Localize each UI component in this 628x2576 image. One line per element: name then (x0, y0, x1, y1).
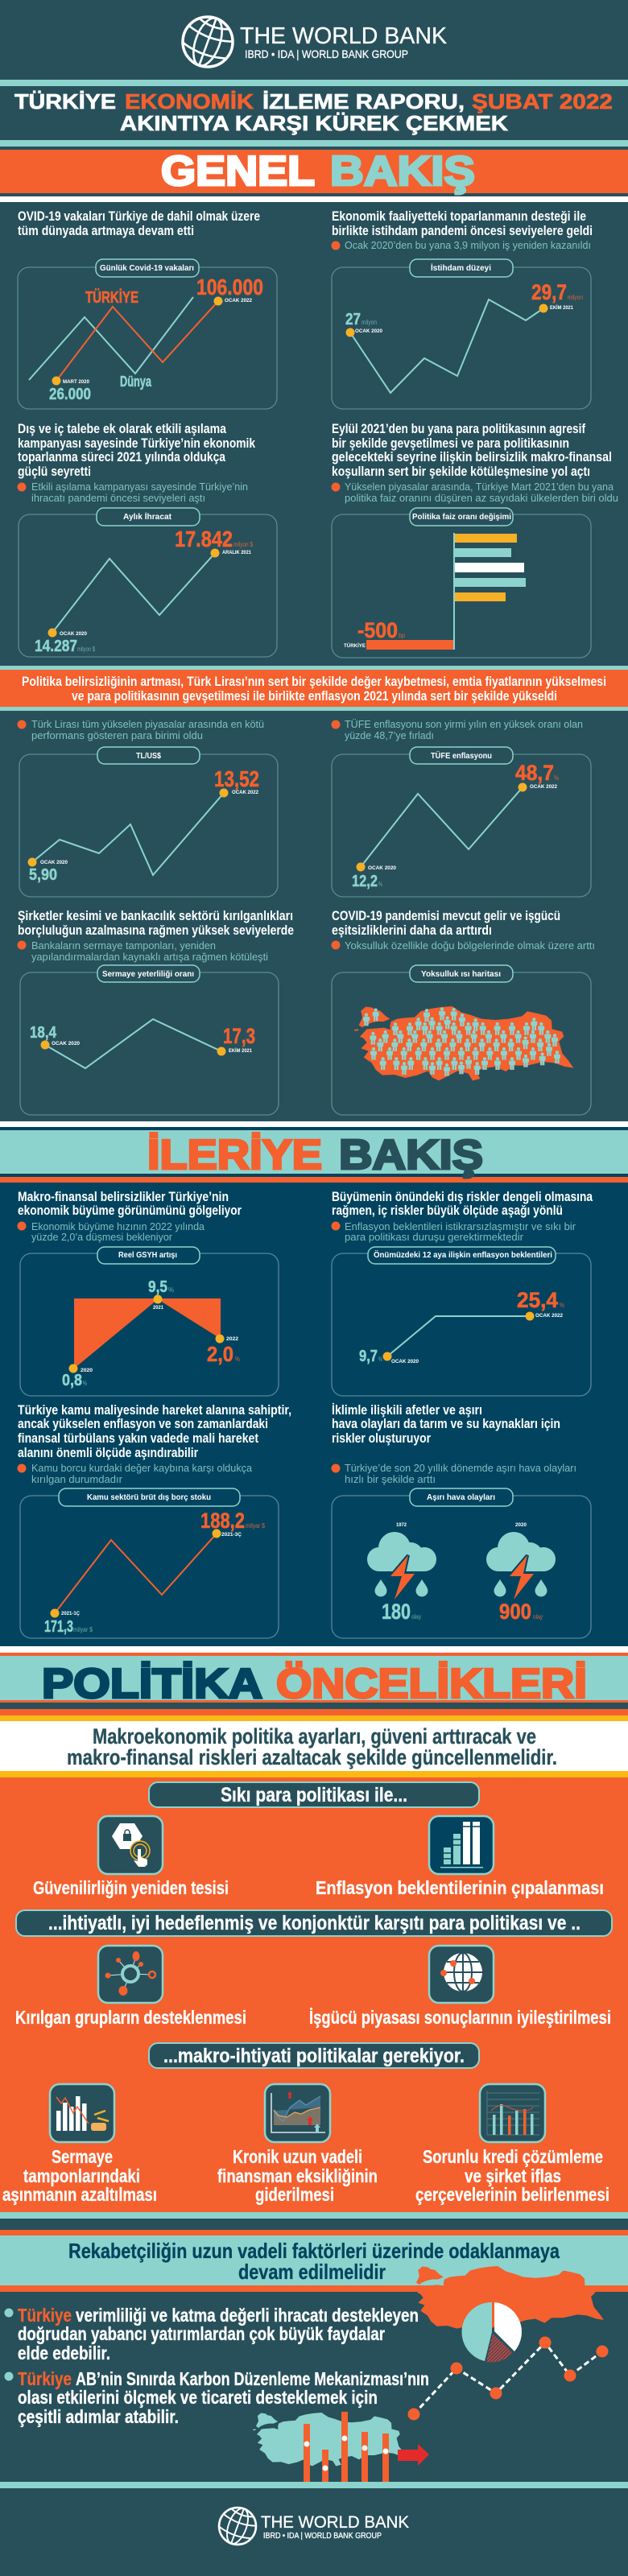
section banner: Genel Bakış: BAKIŞ (330, 148, 475, 195)
text block: corporate and banking: Şirketler kesimi ve bankacılık sektörü kırılganlıkları (18, 908, 293, 923)
panel: real GDP growth chart: 2,0 (207, 1342, 233, 1366)
panel: extreme weather events: 180 (382, 1600, 411, 1624)
panel: real GDP growth chart: % (235, 1355, 240, 1363)
banner: competitiveness (0, 2212, 628, 2292)
text block: corporate and banking: Bankaların sermaye tamponları, yeniden (31, 939, 216, 952)
panel: real GDP growth chart: 9,5 (148, 1278, 167, 1296)
text block: growth outlook: Ekonomik büyüme hızının 2022 yılında (31, 1220, 205, 1232)
panel: extreme weather events: 2020 (515, 1522, 527, 1528)
text block: public finance: kırılgan durumdadır (31, 1473, 123, 1485)
panel: public external debt chart: Kamu sektörü brüt dış borç stoku (87, 1492, 211, 1502)
text block: lira (18, 718, 264, 741)
text block: inequality: COVID-19 pandemisi mevcut gelir ve işgücü (332, 908, 560, 923)
chart: Turkey map with bars and arrow (253, 2412, 429, 2482)
panel: daily covid cases chart: 106.000 (196, 275, 263, 299)
text block: CPI: yüzde 48,7’ye fırladı (345, 729, 434, 741)
text block: exports: güçlü seyretti (18, 464, 91, 479)
map: Turkey orange (412, 2266, 604, 2331)
text block: inequality: Yoksulluk özellikle doğu bölgelerinde olmak üzere arttı (345, 939, 595, 952)
panel: employment level chart: 27 (345, 311, 361, 328)
text block: CPI (332, 718, 583, 741)
caption: capital buffers (2, 2146, 157, 2205)
text block: carbon border: AB’nin Sınırda Karbon Düzenleme Mekanizması’nın (76, 2368, 429, 2389)
icon: rising bars (429, 1816, 494, 1874)
panel: monthly exports chart: milyon $ (77, 645, 95, 653)
panel: CPI inflation chart (332, 747, 591, 897)
panel: extreme weather events: olay (533, 1612, 543, 1620)
panel: CPI inflation chart: % (554, 774, 559, 782)
panel: monthly exports chart (19, 508, 277, 657)
panel: real GDP growth chart: 2021 (153, 1305, 163, 1311)
text block: policy rate: Yükselen piyasalar arasında, Türkiye Mart 2021’den bu yana (345, 481, 614, 493)
panel: extreme weather events (332, 1488, 591, 1638)
panel: capital adequacy chart: 18,4 (30, 1024, 57, 1042)
text block: growth outlook (18, 1189, 242, 1243)
caption: long-term financing: giderilmesi (255, 2184, 334, 2205)
caption: problem loans: ve şirket iflas (465, 2165, 561, 2186)
text block: public finance: ancak yükselen enflasyon ve son zamanlardaki (18, 1416, 268, 1431)
text block: exports: Etkili aşılama kampanyası sayesinde Türkiye’nin (31, 481, 248, 493)
caption: capital buffers: Sermaye (52, 2146, 113, 2167)
panel: monthly exports chart: OCAK 2020 (60, 631, 87, 637)
panel: TL/US$ chart: 13,52 (214, 766, 259, 791)
section banner: Politika Öncelikleri (0, 1646, 628, 1721)
panel: TL/US$ chart: TL/US$ (136, 751, 161, 761)
map: Turkey with people (354, 1006, 573, 1080)
text block: policy rate: bir şekilde gevşetilmesi ve para politikasının (332, 436, 569, 451)
panel: daily covid cases chart (18, 259, 277, 409)
text block: inequality (332, 908, 595, 952)
text block: climate: hava olayları da tarım ve su kaynakları için (332, 1416, 560, 1431)
text block: carbon border (5, 2368, 429, 2427)
panel: employment level chart: İstihdam düzeyi (431, 262, 491, 273)
text block: exports: Dış ve iç talebe ek olarak etkili aşılama (18, 421, 226, 436)
icon: network (98, 1946, 163, 2003)
text block: policy rate: politika faiz oranını düşüren az sayıdaki ülkelerden biri oldu (345, 492, 618, 504)
text block: carbon border: Türkiye (18, 2368, 72, 2389)
panel: monthly exports chart: Aylık İhracat (123, 511, 171, 522)
text block: carbon border: olası etkilerini ölçmek ve ticareti desteklemek için (18, 2387, 378, 2408)
panel: public external debt chart: 2021-1Ç (61, 1611, 80, 1616)
panel: policy rate change bar chart: -500 (357, 618, 398, 642)
text block: climate: İklimle ilişkili afetler ve aşırı (332, 1402, 482, 1418)
panel: CPI inflation chart: OCAK 2020 (368, 865, 396, 871)
panel: daily covid cases chart: TÜRKİYE (85, 288, 138, 307)
section banner: Genel Bakış (0, 148, 628, 202)
text block: corporate and banking: borçluluğun azalmasına rağmen yüksek seviyelerde (18, 923, 294, 938)
panel: poverty heat map: Yoksulluk ısı haritası (421, 969, 501, 979)
text block: corporate and banking: yapılandırmalardan kaynaklı artışa rağmen kötüleşti (31, 951, 268, 963)
icon: falling bars and coins (50, 2084, 114, 2142)
panel: TL/US$ chart: OCAK 2022 (232, 790, 258, 795)
panel: policy rate change bar chart: Politika faiz oranı değişimi (412, 512, 511, 522)
text block: exports: toparlanma süreci 2021 yılında oldukça (18, 449, 225, 464)
text block: exports: kampanyası sayesinde Türkiye’nin ekonomik (18, 436, 255, 451)
panel: extreme weather events: 900 (499, 1600, 531, 1624)
text block: macroeconomic policy statement (0, 1721, 628, 1777)
logo: The World Bank top: IBRD • IDA | WORLD BANK GROUP (245, 47, 408, 60)
panel: public external debt chart: milyar $ (246, 1521, 265, 1530)
panel: capital adequacy chart: 17,3 (223, 1024, 255, 1048)
text block: public finance: finansal türbülans yakın vadede mali hareket (18, 1430, 258, 1446)
text block: policy rate (332, 421, 618, 504)
callout banner: inflation (0, 666, 628, 711)
panel: policy priorities: Kırılgan grupların desteklenmesi (15, 2007, 246, 2028)
panel: real GDP growth chart (20, 1247, 279, 1396)
panel: CPI inflation chart: OCAK 2022 (530, 784, 557, 790)
caption: long-term financing: Kronik uzun vadeli (233, 2146, 362, 2167)
panel: CPI inflation chart: 12,2 (352, 873, 378, 890)
text block: risks: rağmen, iç riskler büyük ölçüde aşağı yönlü (332, 1203, 563, 1218)
text block: CPI: TÜFE enflasyonu son yirmi yılın en yüksek oranı olan (345, 718, 583, 730)
section banner: Genel Bakış: GENEL (161, 148, 315, 195)
panel: capital adequacy chart (20, 965, 279, 1115)
text block: growth outlook: ekonomik büyüme görünümünü gölgeliyor (18, 1203, 242, 1218)
section banner: İleriye Bakış (0, 1121, 628, 1646)
panel: inflation expectations chart (332, 1247, 591, 1396)
text block: lira: performans gösteren para birimi oldu (31, 729, 203, 741)
section banner: İleriye Bakış: BAKIŞ (339, 1132, 483, 1179)
text block: public finance: Kamu borcu kurdaki değer kaybına karşı oldukça (31, 1462, 253, 1474)
heading pill: macroprudential: ...makro-ihtiyati politikalar gerekiyor. (163, 2045, 465, 2067)
panel: TL/US$ chart (19, 747, 278, 897)
panel: employment level chart: milyon (362, 318, 377, 326)
panel: CPI inflation chart: 48,7 (515, 761, 554, 785)
panel: extreme weather events: 1972 (396, 1522, 407, 1528)
banner: competitiveness: devam edilmelidir (238, 2260, 386, 2284)
text block: risks: Enflasyon beklentileri istikrarsızlaşmıştır ve sıkı bir (345, 1220, 576, 1232)
text block: employment: Ocak 2020’den bu yana 3,9 milyon iş yeniden kazanıldı (345, 239, 591, 251)
panel: CPI inflation chart: TÜFE enflasyonu (431, 750, 492, 761)
text block: public finance (18, 1402, 291, 1485)
panel: daily covid cases chart: Dünya (120, 374, 152, 390)
text block: growth outlook: Makro-finansal belirsizlikler Türkiye’nin (18, 1189, 229, 1204)
text block: FDI: Türkiye (18, 2305, 72, 2326)
logo: The World Bank bottom (214, 2503, 409, 2549)
panel: monthly exports chart: milyon $ (233, 540, 253, 548)
text block: FDI: verimliliği ve katma değerli ihracatı destekleyen (76, 2305, 419, 2326)
panel: inflation expectations chart: % (560, 1301, 564, 1309)
text block: Covid: tüm dünyada artmaya devam etti (18, 223, 194, 238)
text block: public finance: Türkiye kamu maliyesinde hareket alanına sahiptir, (18, 1402, 291, 1418)
panel: monthly exports chart: 17.842 (175, 526, 233, 551)
logo: The World Bank top (176, 10, 448, 73)
title band (0, 80, 628, 147)
icon: bar chart with grid (480, 2084, 545, 2142)
text block: risks (332, 1189, 593, 1243)
icon: line chart with arrows (265, 2084, 330, 2142)
panel: capital adequacy chart: Sermaye yeterliliği oranı (102, 969, 194, 979)
panel: daily covid cases chart: OCAK 2022 (225, 298, 252, 303)
title band: İZLEME RAPORU, (262, 89, 465, 114)
panel: monthly exports chart: 14.287 (35, 638, 77, 655)
panel: extreme weather events: olay (411, 1612, 422, 1620)
text block: employment (332, 208, 593, 251)
panel: public external debt chart: 188,2 (200, 1509, 245, 1533)
panel: TL/US$ chart: OCAK 2020 (40, 860, 68, 865)
icon: storm cloud 2020 (486, 1532, 556, 1600)
caption: long-term financing: finansman eksikliğinin (217, 2165, 378, 2186)
panel: real GDP growth chart: 2020 (81, 1368, 93, 1373)
text block: carbon border: çeşitli adımlar atabilir. (18, 2406, 179, 2427)
logo: The World Bank bottom: THE WORLD BANK (261, 2513, 409, 2532)
panel: policy rate change bar chart (332, 508, 591, 658)
text block: exports (18, 421, 255, 504)
text block: growth outlook: yüzde 2,0’a düşmesi bekleniyor (31, 1231, 173, 1243)
panel: employment level chart: milyon (568, 293, 583, 301)
panel: real GDP growth chart: % (168, 1286, 174, 1294)
icon: globe (429, 1946, 494, 2003)
panel: TL/US$ chart: 5,90 (29, 866, 57, 884)
panel: real GDP growth chart: 0,8 (62, 1372, 82, 1389)
caption: capital buffers: tamponlarındaki (23, 2165, 140, 2186)
panel: public external debt chart (20, 1488, 279, 1638)
panel: employment level chart (332, 259, 591, 409)
chart: pie (462, 2302, 522, 2363)
section banner: Politika Öncelikleri: ÖNCELİKLERİ (276, 1661, 587, 1707)
panel: daily covid cases chart: Günlük Covid-19 vakaları (100, 263, 194, 273)
panel: capital adequacy chart: EKİM 2021 (229, 1047, 252, 1054)
panel: real GDP growth chart: 2022 (226, 1336, 238, 1342)
panel: daily covid cases chart: MART 2020 (63, 379, 89, 385)
panel: inflation expectations chart: OCAK 2020 (391, 1359, 419, 1364)
title band: ŞUBAT 2022 (472, 89, 613, 114)
caption: long-term financing (217, 2146, 378, 2205)
text block: climate (332, 1402, 576, 1485)
panel: extreme weather events: Aşırı hava olayları (427, 1492, 495, 1502)
panel: inflation expectations chart: % (378, 1355, 382, 1363)
panel: CPI inflation chart: % (378, 880, 382, 888)
panel: inflation expectations chart: Önümüzdeki 12 aya ilişkin enflasyon beklentileri (374, 1249, 552, 1260)
chart: dashed trend line (407, 2336, 609, 2420)
panel: public external debt chart: 2021-3Ç (221, 1532, 242, 1538)
text block: climate: hızlı bir şekilde arttı (345, 1473, 436, 1485)
text block: public finance: alanını önemli ölçüde aşındırabilir (18, 1445, 198, 1460)
heading pill: tight monetary policy: Sıkı para politikası ile... (221, 1784, 407, 1806)
panel: real GDP growth chart: % (83, 1379, 87, 1387)
text block: inequality: eşitsizliklerini daha da arttırdı (332, 923, 492, 938)
title band: EKONOMİK (125, 89, 254, 114)
caption: problem loans (415, 2146, 609, 2205)
icon: storm cloud 1972 (367, 1532, 436, 1600)
section banner: Politika Öncelikleri: POLİTİKA (42, 1661, 262, 1707)
icon: security lock touch (98, 1816, 163, 1874)
text block: corporate and banking (18, 908, 294, 963)
text block: lira: Türk Lirası tüm yükselen piyasalar arasında en kötü (31, 718, 264, 730)
panel: public external debt chart: 171,3 (44, 1618, 73, 1636)
panel: policy rate change bar chart: bp (399, 631, 405, 639)
logo: The World Bank top: THE WORLD BANK (240, 23, 448, 49)
panel: real GDP growth chart: Reel GSYH artışı (118, 1250, 177, 1260)
panel: inflation expectations chart: OCAK 2022 (535, 1313, 563, 1319)
panel: poverty heat map (332, 965, 591, 1115)
logo: The World Bank bottom: IBRD • IDA | WORLD BANK GROUP (263, 2532, 382, 2541)
panel: inflation expectations chart: 25,4 (517, 1288, 558, 1312)
panel: employment level chart: EKİM 2021 (550, 304, 573, 311)
caption: capital buffers: aşınmanın azaltılması (2, 2184, 157, 2205)
text block: FDI: doğrudan yabancı yatırımlardan çok büyük faydalar (18, 2323, 385, 2344)
text block: FDI: elde edebilir. (18, 2343, 110, 2363)
text block: climate: Türkiye’de son 20 yıllık dönemde aşırı hava olayları (345, 1462, 576, 1474)
section banner: İleriye Bakış: İLERİYE (147, 1132, 322, 1179)
panel: daily covid cases chart: 26.000 (49, 386, 91, 403)
panel: capital adequacy chart: OCAK 2020 (52, 1041, 80, 1046)
panel: policy priorities (0, 1777, 628, 2212)
heading pill: tight monetary policy (149, 1782, 479, 1807)
title band: AKINTIYA KARŞI KÜREK ÇEKMEK (120, 111, 508, 135)
text block: exports: ihracatı pandemi öncesi seviyeleri aştı (31, 492, 205, 504)
text block: climate: riskler oluşturuyor (332, 1430, 431, 1446)
text block: FDI (5, 2305, 419, 2363)
panel: monthly exports chart: ARALIK 2021 (222, 550, 251, 555)
panel: policy rate change bar chart: TÜRKİYE (344, 642, 366, 649)
panel: employment level chart: 29,7 (531, 280, 567, 304)
panel: employment level chart: OCAK 2020 (355, 328, 382, 334)
panel: inflation expectations chart: 9,7 (359, 1348, 378, 1365)
panel: policy priorities: Güvenilirliğin yeniden tesisi (33, 1877, 229, 1898)
text block: Covid (18, 208, 260, 238)
text block: risks: para politikası duruşu gerektirmektedir (345, 1231, 524, 1243)
text block: macroeconomic policy statement: Makroekonomik politika ayarları, güveni arttıracak ve (93, 1724, 536, 1748)
panel: public external debt chart: milyar $ (73, 1625, 93, 1633)
text block: Covid: OVID-19 vakaları Türkiye de dahil olmak üzere (18, 208, 260, 224)
title band: TÜRKİYE (14, 89, 116, 114)
